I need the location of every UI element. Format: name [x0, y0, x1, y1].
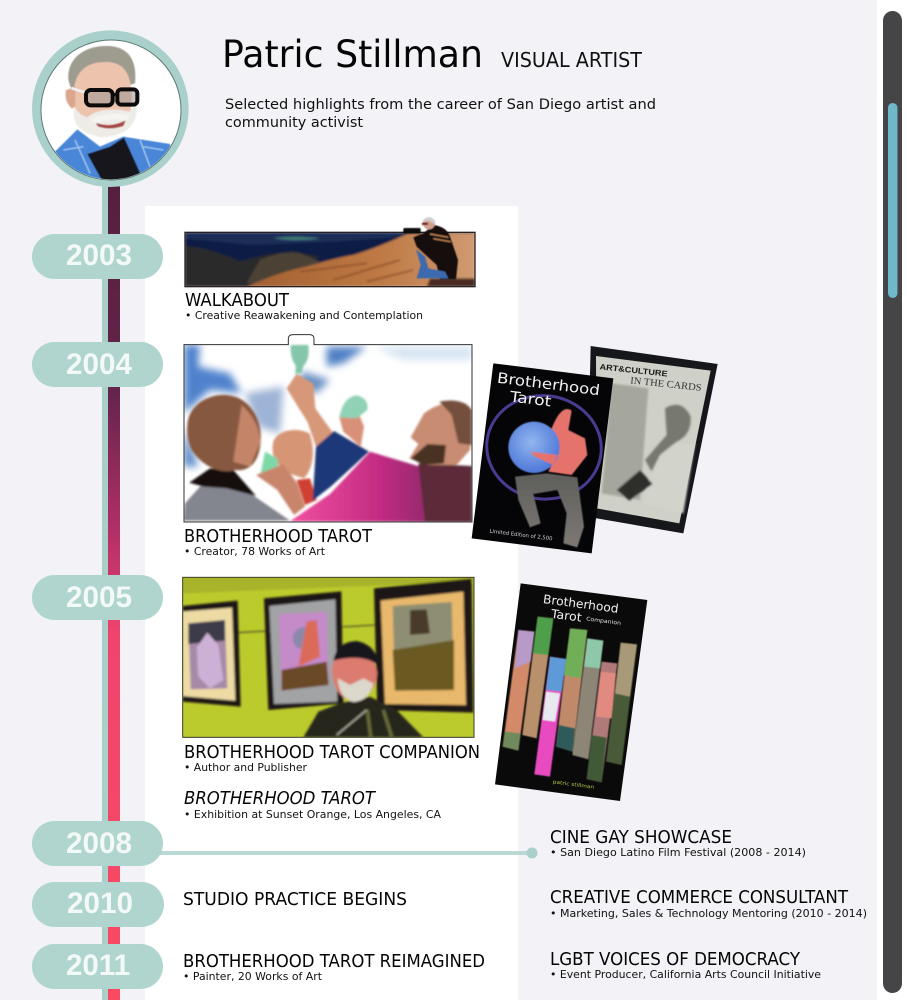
heading: reimagined: BROTHERHOOD TAROT REIMAGINED: [183, 951, 485, 972]
heading: brotherhood tarot companion: [184, 742, 480, 774]
year pill 2010: [32, 882, 164, 927]
year pill 2011: [32, 944, 163, 989]
title: Patric Stillman: [222, 33, 483, 76]
heading: creative commerce consultant: • Marketing, Sales & Technology Mentoring (2010 - 2014): [550, 907, 867, 920]
year pill 2004: [32, 342, 163, 387]
book cover: companion: [495, 583, 647, 801]
heading: brotherhood tarot companion: BROTHERHOOD TAROT COMPANION: [184, 742, 480, 763]
book cover: companion: patric stillman: [552, 779, 594, 791]
year pill 2008: 2008: [66, 827, 132, 860]
heading: walkabout: WALKABOUT: [185, 290, 290, 311]
book cover: companion: Brotherhood: [542, 592, 619, 616]
heading: exhibition: • Exhibition at Sunset Orange, Los Angeles, CA: [184, 808, 441, 821]
photo: brotherhood tarot ritual: [184, 335, 472, 522]
year pill 2003: [32, 234, 163, 279]
heading: brotherhood tarot: BROTHERHOOD TAROT: [184, 526, 373, 547]
content panel: [145, 206, 518, 1000]
heading: studio practice: STUDIO PRACTICE BEGINS: [183, 889, 407, 910]
heading: lgbt voices: • Event Producer, California Arts Council Initiative: [550, 968, 821, 981]
heading: reimagined: [183, 951, 485, 983]
heading: lgbt voices: [550, 949, 821, 981]
heading: brotherhood tarot: • Creator, 78 Works of Art: [184, 545, 326, 558]
newspaper clipping: in the cards: ART&CULTURE: [599, 362, 669, 379]
heading: cine gay showcase: CINE GAY SHOWCASE: [550, 827, 732, 848]
heading: brotherhood tarot companion: • Author and Publisher: [184, 761, 307, 774]
book cover: companion: Companion: [586, 616, 621, 627]
heading: creative commerce consultant: [550, 887, 867, 920]
heading: lgbt voices: LGBT VOICES OF DEMOCRACY: [550, 949, 801, 970]
year pill 2003: 2003: [66, 239, 132, 272]
intro text: community activist: [225, 115, 363, 131]
photo: gallery exhibition: [183, 577, 474, 737]
portrait medallion: [32, 30, 189, 187]
heading: reimagined: • Painter, 20 Works of Art: [183, 970, 323, 983]
year pill 2005: [32, 575, 163, 620]
year pill 2010: 2010: [67, 887, 133, 920]
book cover: brotherhood tarot: Brotherhood: [496, 370, 601, 399]
book cover: brotherhood tarot: Tarot: [508, 388, 553, 410]
newspaper clipping: in the cards: IN THE CARDS: [630, 375, 702, 394]
year pill 2004: 2004: [66, 348, 132, 381]
heading: walkabout: [185, 290, 423, 322]
heading: exhibition: BROTHERHOOD TAROT: [184, 788, 377, 809]
book cover: brotherhood tarot: [472, 363, 613, 553]
year pill 2008: [32, 821, 163, 866]
subtitle: visual artist: VISUAL ARTIST: [501, 48, 643, 72]
year pill 2005: 2005: [66, 581, 132, 614]
photo: walkabout landscape: [185, 217, 475, 287]
intro text: [225, 97, 656, 131]
heading: brotherhood tarot: [184, 526, 373, 558]
heading: cine gay showcase: • San Diego Latino Film Festival (2008 - 2014): [550, 846, 806, 859]
book cover: brotherhood tarot: Limited Edition of 2,500: [489, 529, 553, 542]
heading: walkabout: • Creative Reawakening and Contemplation: [185, 309, 423, 322]
heading: creative commerce consultant: CREATIVE COMMERCE CONSULTANT: [550, 887, 849, 908]
connector: 2008 to Cine Gay Showcase: [160, 848, 538, 858]
book cover: companion: Tarot: [549, 607, 583, 625]
timeline stem: [102, 180, 120, 1000]
scrollbar: [883, 11, 902, 993]
year pill 2011: 2011: [66, 949, 130, 982]
intro text: Selected highlights from the career of San Diego artist and: [225, 97, 656, 113]
heading: cine gay showcase: [550, 827, 806, 859]
newspaper clipping: in the cards: [587, 346, 718, 533]
heading: exhibition: [184, 788, 441, 821]
